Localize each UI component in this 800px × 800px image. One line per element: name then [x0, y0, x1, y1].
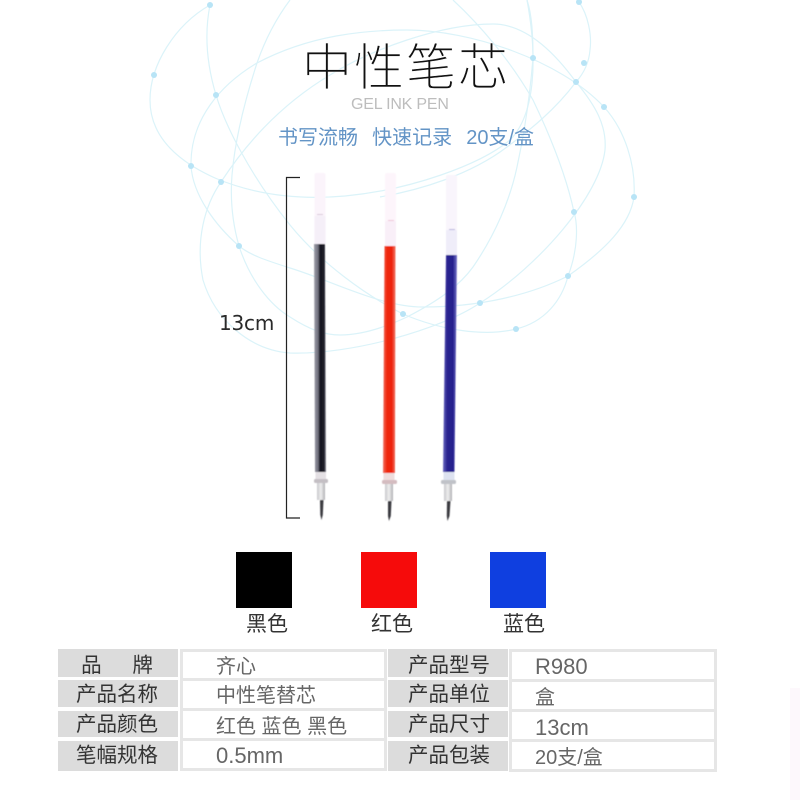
spec table — [58, 649, 717, 772]
swatch label: red: 红色 — [371, 613, 413, 636]
right labels: 产品尺寸 — [408, 713, 490, 736]
swatch label: black: 黑色 — [246, 613, 288, 636]
swatch label: blue: 蓝色 — [503, 613, 545, 636]
right labels — [388, 649, 508, 771]
subtitle: english: GEL INK PEN — [351, 96, 449, 113]
left values: 中性笔替芯 — [216, 685, 316, 707]
swatch: black — [236, 552, 292, 608]
tagline: 书写流畅 快速记录 20支/盒 — [278, 127, 534, 149]
right values: 13cm — [535, 715, 589, 740]
faint pink edge patch — [790, 688, 800, 800]
dimension label: 13cm — [219, 311, 274, 335]
right labels: 产品单位 — [408, 683, 490, 706]
table value cells — [180, 649, 717, 772]
left labels: 产品名称 — [76, 683, 158, 706]
dimension bracket — [286, 176, 300, 519]
blue refill — [441, 175, 457, 521]
right values: 盒 — [535, 687, 555, 709]
red refill — [382, 173, 397, 521]
right labels: 产品包装 — [408, 744, 490, 767]
left values: 齐心 — [216, 656, 256, 678]
black refill — [314, 173, 328, 520]
right labels: 产品型号 — [408, 654, 490, 677]
left values: 0.5mm — [216, 743, 283, 768]
right values: 20支/盒 — [535, 747, 603, 769]
left labels: 产品颜色 — [76, 713, 158, 736]
swatch: red — [361, 552, 417, 608]
left values — [216, 656, 347, 768]
swatch: blue — [490, 552, 546, 608]
left labels: 品 牌 — [81, 654, 153, 677]
title: 中性笔芯 — [302, 40, 510, 96]
left labels: 笔幅规格 — [76, 744, 158, 767]
right values: R980 — [535, 654, 588, 679]
left labels — [58, 649, 178, 771]
left values: 红色 蓝色 黑色 — [216, 716, 347, 738]
right values — [535, 654, 603, 769]
